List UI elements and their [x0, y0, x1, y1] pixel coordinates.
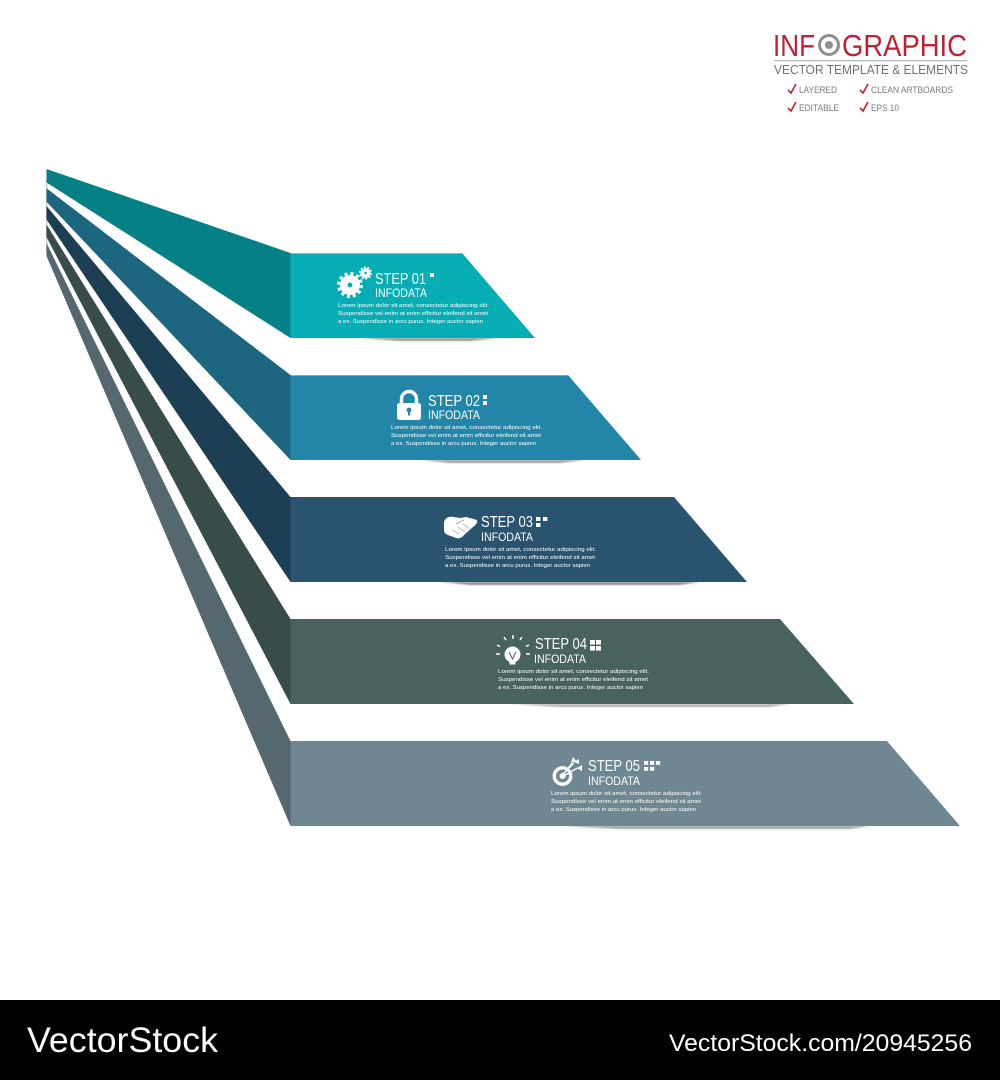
step 5 subheading: INFODATA: [588, 774, 640, 788]
logo checklist: [788, 84, 953, 113]
logo title: [773, 28, 967, 63]
step 2 front panel: [290, 375, 641, 460]
step 3 body text: a ex. Suspendisse in arcu purus. Integer auctor sapien: [445, 563, 590, 569]
panel: step 3: [46, 206, 747, 585]
logo: infographic template badge: [773, 28, 968, 113]
step 3 body text: [445, 547, 596, 569]
step 5 body text: Lorem ipsum dolor sit amet, consectetur adipiscing elit.: [551, 791, 702, 797]
icon: padlock: [397, 392, 421, 420]
logo title: INF: [773, 28, 815, 63]
logo checklist: EDITABLE: [799, 103, 839, 113]
step 2 body text: Lorem ipsum dolor sit amet, consectetur adipiscing elit.: [391, 425, 542, 431]
step 1 body text: Suspendisse vel enim at enim efficitur eleifend sit amet: [338, 311, 488, 317]
step 3 side ribbon: [46, 206, 290, 582]
step 4 body text: a ex. Suspendisse in arcu purus. Integer auctor sapien: [498, 685, 643, 691]
step 5 squares: [644, 761, 660, 771]
step 1 side ribbon: [46, 169, 290, 338]
icon: handshake: [444, 517, 477, 538]
step 1 subheading: INFODATA: [375, 286, 427, 300]
step 2 side ribbon: [46, 188, 290, 460]
step 3 heading: STEP 03: [481, 514, 533, 531]
step 5 shadow: [560, 826, 870, 829]
step 1 front panel: [290, 253, 535, 338]
step 1 body text: [338, 303, 489, 325]
footer: VectorStock watermark bar: [0, 1000, 1000, 1080]
step 2 squares: [483, 395, 487, 405]
step 2 body text: [391, 425, 542, 447]
step 1 body text: a ex. Suspendisse in arcu purus. Integer auctor sapien: [338, 319, 483, 325]
step 2 subheading: INFODATA: [428, 408, 480, 422]
panel: step 4: [46, 224, 854, 707]
step 2 shadow: [420, 460, 585, 463]
step 5 heading: STEP 05: [588, 758, 640, 775]
step 3 body text: Lorem ipsum dolor sit amet, consectetur adipiscing elit.: [445, 547, 596, 553]
logo subtitle: VECTOR TEMPLATE & ELEMENTS: [774, 63, 968, 77]
step 5 front panel: [290, 741, 960, 826]
step 1 body text: Lorem ipsum dolor sit amet, consectetur adipiscing elit.: [338, 303, 489, 309]
step 4 body text: Suspendisse vel enim at enim efficitur eleifend sit amet: [498, 677, 648, 683]
step 4 front panel: [290, 619, 854, 704]
step 1 shadow: [357, 338, 500, 341]
logo checklist: CLEAN ARTBOARDS: [871, 85, 953, 95]
step 1 squares: [430, 273, 434, 277]
logo target O: [820, 36, 838, 54]
panel: step 5: [46, 243, 960, 829]
step 4 shadow: [510, 704, 790, 707]
footer brand name: VectorStock: [27, 1021, 219, 1060]
logo title: GRAPHIC: [842, 28, 967, 63]
icon: target with arrows: [554, 757, 582, 784]
step 4 body text: [498, 669, 649, 691]
step 3 squares: [536, 517, 547, 527]
step 5 body text: [551, 791, 702, 813]
step 5 side ribbon: [46, 243, 290, 826]
logo checklist: LAYERED: [799, 85, 837, 95]
step 3 shadow: [440, 582, 700, 585]
step 2 body text: Suspendisse vel enim at enim efficitur eleifend sit amet: [391, 433, 541, 439]
icon: gears: [339, 267, 371, 296]
step 4 body text: Lorem ipsum dolor sit amet, consectetur adipiscing elit.: [498, 669, 649, 675]
step 3 subheading: INFODATA: [481, 530, 533, 544]
logo checklist: EPS 10: [871, 103, 899, 113]
step 2 heading: STEP 02: [428, 393, 480, 410]
step 4 heading: STEP 04: [535, 636, 587, 653]
step 5 body text: Suspendisse vel enim at enim efficitur eleifend sit amet: [551, 799, 701, 805]
footer image id: VectorStock.com/20945256: [669, 1030, 972, 1057]
step 1 heading: STEP 01: [375, 271, 426, 288]
step 5 body text: a ex. Suspendisse in arcu purus. Integer auctor sapien: [551, 807, 696, 813]
step 4 subheading: INFODATA: [534, 652, 586, 666]
step 2 body text: a ex. Suspendisse in arcu purus. Integer auctor sapien: [391, 441, 536, 447]
panel: step 1: [46, 169, 535, 341]
panel: step 2: [46, 188, 641, 463]
step 3 body text: Suspendisse vel enim at enim efficitur eleifend sit amet: [445, 555, 595, 561]
icon: light bulb: [496, 635, 530, 664]
step 4 side ribbon: [46, 224, 290, 704]
step 4 squares: [590, 640, 601, 651]
step 3 front panel: [290, 497, 747, 582]
